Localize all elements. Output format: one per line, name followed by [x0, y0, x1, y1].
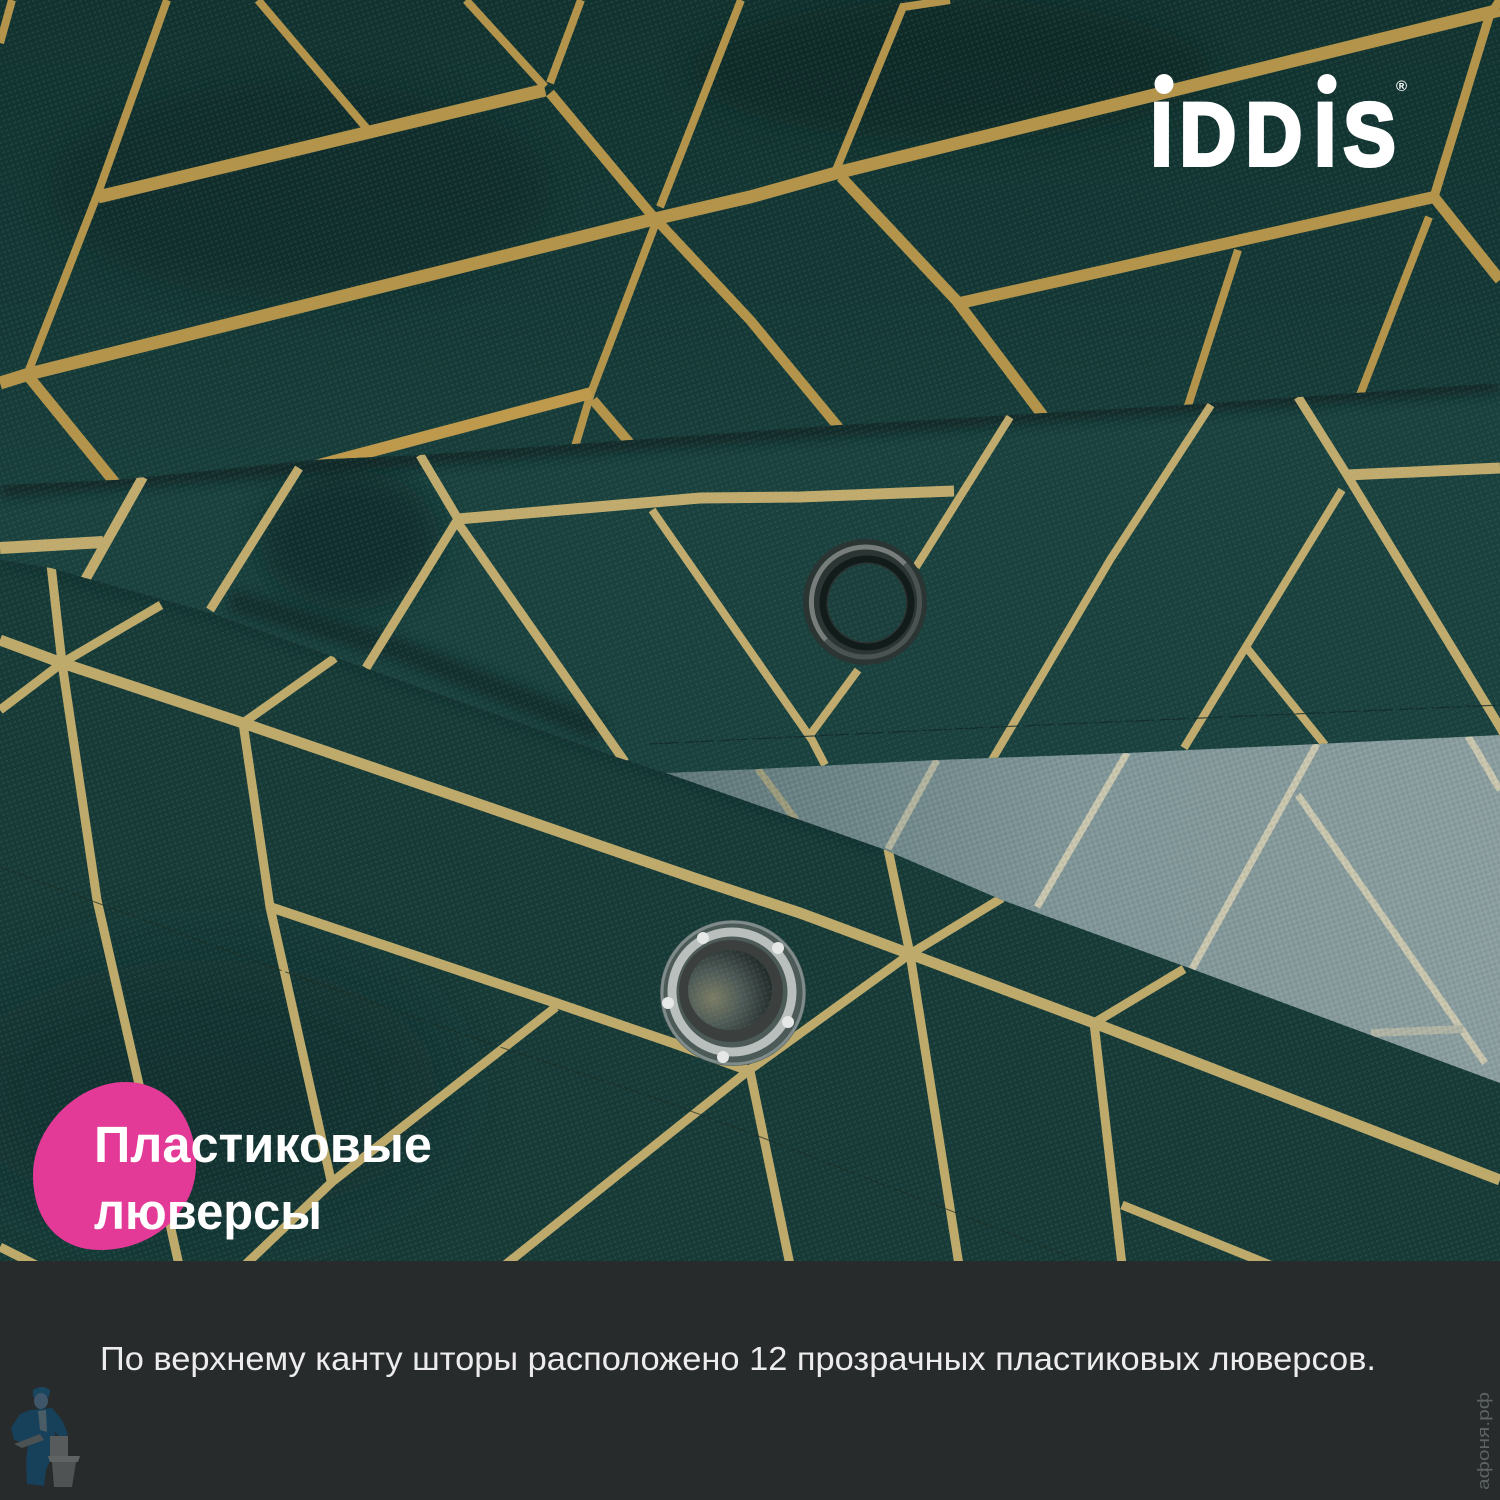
heading: Пластиковые люверсы: Пластиковые [94, 1116, 432, 1173]
icon: lower clear plastic grommet [660, 920, 806, 1066]
logo: IDDIS: ® [1396, 78, 1407, 95]
panel: reverse side grey fabric [640, 735, 1500, 1083]
panel: bottom caption band [0, 1261, 1500, 1500]
heading: Пластиковые люверсы: люверсы [94, 1183, 322, 1240]
icon: plumber with toilet watermark [11, 1387, 80, 1487]
text: caption: По верхнему канту шторы расположено 12 прозрачных пластиковых люверсов. [100, 1340, 1376, 1377]
heading: Пластиковые люверсы [94, 1116, 432, 1240]
text: vertical site watermark: афоня.рф [1474, 1392, 1493, 1490]
panel: top curtain layer [0, 0, 1500, 495]
logo: IDDIS: IDDIS [1151, 84, 1396, 184]
panel: middle curtain hem [0, 380, 1500, 800]
icon: upper metal-rimmed grommet [803, 539, 927, 665]
panel: lower curtain layer [0, 550, 1500, 1270]
icon: pink blob [33, 1082, 196, 1250]
